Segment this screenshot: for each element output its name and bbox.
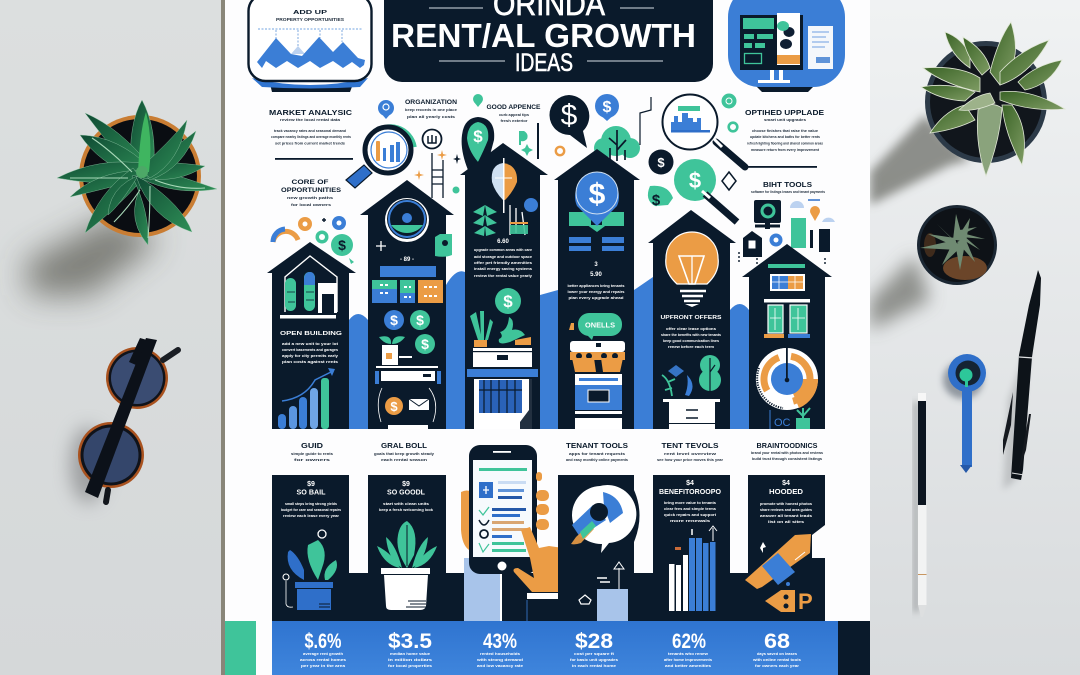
icon: round badge	[422, 130, 442, 148]
stat 6: with online rental tools	[752, 658, 801, 662]
panel: lower column 6: HOODED	[769, 489, 803, 496]
icon: orange tag letters	[765, 589, 813, 614]
labels row: section headings: TENT TEVOLS	[662, 441, 718, 450]
text block: organization: plan all yearly costs	[407, 115, 455, 119]
panel: column 1 building: plan costs against rents	[282, 360, 338, 364]
stat 5: and better amenities	[665, 664, 711, 668]
text block: organization: keep records in one place	[405, 108, 457, 112]
labels row: section headings: for owners	[294, 458, 330, 462]
labels row: section headings: apps for tenant requests	[569, 452, 625, 456]
icon: light bulb two-tone	[492, 158, 517, 213]
icon: fern leaf	[473, 205, 497, 236]
icon cluster: column 6 top	[739, 200, 835, 266]
icon: teal pin behind column 3	[462, 117, 494, 170]
text block: organization	[405, 100, 457, 119]
icon: speech badge: ONELLS	[585, 322, 615, 330]
stat 6	[752, 630, 801, 668]
panel: column 4 building: plan every upgrade ahead	[568, 296, 624, 300]
icon: ladder and sparkles	[414, 150, 461, 198]
text block: core opportunities: new growth paths	[287, 196, 333, 200]
icon: teal coin with magnifier handle	[674, 159, 737, 222]
icon: magnifier with bars	[346, 126, 415, 188]
panel: top-left chart card	[248, 0, 372, 92]
panel: column 3 building: offer pet friendly amenities	[474, 261, 532, 265]
text block: optimized upgrade: choose finishes that raise the value	[752, 129, 818, 133]
panel: column 5 building: UPFRONT OFFERS	[660, 315, 722, 321]
panel: column 5 building	[648, 210, 736, 429]
icon: small succulent in dark pot	[917, 205, 997, 285]
panel: lower column 5: quick repairs and support	[664, 513, 717, 517]
panel: dark corner block	[838, 621, 870, 675]
panel: lower column 5: more renewals	[670, 519, 710, 523]
icon: plants and tree	[662, 355, 721, 396]
panel: column 4 building: better appliances bring tenants	[568, 284, 624, 288]
stat 3: 43%	[483, 630, 517, 653]
stat 6: 68	[764, 630, 790, 653]
icon: light box with arrow	[579, 562, 628, 621]
icon: plant and blue letters	[770, 408, 810, 429]
text block: best tools: software for listings leases and tenant payments	[751, 190, 825, 194]
icon cluster: column 1 top	[273, 216, 354, 264]
panel: column 2 building: - 89 -	[400, 257, 414, 263]
icon: round sunglasses	[78, 338, 178, 502]
icon: kitchen appliance	[570, 341, 625, 429]
text block: market analysis: MARKET ANALYSIC	[269, 108, 353, 117]
panel: column 1 building: OPEN BUILDING	[280, 331, 342, 337]
text block: market analysis	[269, 108, 353, 160]
icon: coins: $	[416, 312, 424, 328]
text block: optimized upgrade: measure return from every improvement	[751, 148, 820, 152]
poster sheet	[225, 0, 870, 675]
panel: lower column 2	[368, 475, 446, 621]
poster edge	[221, 0, 225, 675]
panel: lower column 5: clear fees and simple terms	[664, 507, 716, 511]
panel: column 5 building: keep good communication lines	[663, 339, 719, 343]
icon: hand pointing	[514, 472, 570, 592]
icon: orange coin and envelope: $	[390, 399, 398, 414]
panel: top-left chart card: ADD UP	[293, 10, 328, 16]
text block: core opportunities	[281, 180, 341, 207]
icon: phone with checklist and hand	[461, 445, 573, 621]
stat 4: for basic unit upgrades	[570, 658, 618, 662]
icon: teal sparkle and letter	[519, 123, 539, 159]
stat 4: $28	[575, 630, 613, 653]
text block: good appeal: fresh exterior	[500, 119, 528, 123]
panel: lower column 6: $4	[782, 480, 790, 487]
icon: teal coin with magnifier handle: $	[689, 168, 701, 193]
stat 2: $3.5	[388, 630, 432, 653]
labels row: section headings: brand your rental with photos and reviews	[751, 451, 823, 455]
icon: house facade	[280, 256, 337, 318]
stat 6: days saved on leases	[757, 652, 797, 656]
panel: lower column 4	[558, 475, 640, 621]
shadow: small plant	[870, 255, 930, 330]
stat 5: tenants who renew	[668, 652, 708, 656]
panel: lower column 5: bring more value to tenants	[664, 501, 716, 505]
panel: column 1 building: add a new unit to your lot	[282, 342, 339, 346]
icon: blue location pin	[378, 100, 394, 119]
title: IDEAS	[515, 49, 573, 77]
icon: white dresser	[663, 399, 720, 429]
icon: small coins: $	[657, 155, 665, 170]
panel: lower column 2: $9	[402, 481, 410, 488]
panel: lower column 6: promote with honest photos	[760, 502, 812, 506]
labels row: section headings: and easy monthly online payments	[566, 458, 628, 462]
panel: lower column 2: start with clean units	[383, 502, 429, 506]
panel: lower column 6: list on all sites	[768, 520, 804, 524]
panel: column 3 building	[460, 143, 548, 429]
chart: donut	[756, 347, 818, 410]
panel: column 4 building	[554, 149, 640, 429]
title: RENT/AL GROWTH	[391, 17, 696, 54]
panel: column 5 building: share the benefits with new tenants	[661, 333, 721, 337]
text block: best tools	[751, 180, 825, 194]
labels row: section headings: rent level overview	[664, 452, 716, 456]
text block: market analysis: review the local rental data	[280, 118, 341, 122]
labels row: section headings: goals that keep growth steady	[374, 452, 435, 456]
panel: column 3 building: review the rental value yearly	[474, 274, 533, 278]
stat 1: average rent growth	[303, 652, 344, 656]
labels row: section headings: simple guide to rents	[291, 452, 333, 456]
icon: orange coin and envelope	[378, 388, 436, 422]
panel: teal corner block	[225, 621, 256, 675]
icon: teal pouch	[648, 186, 673, 209]
icon: white cabinet	[467, 348, 538, 429]
text block: good appeal: curb appeal tips	[499, 113, 529, 117]
icon: coins	[384, 310, 435, 354]
title	[391, 0, 696, 77]
icon: monitor	[740, 13, 803, 83]
labels row: section headings: GRAL BOLL	[381, 441, 427, 450]
background: desk left	[0, 0, 225, 675]
stat 2: median home value	[390, 652, 430, 656]
panel: lower column 6	[745, 475, 825, 621]
icon: blue dollar shield	[569, 172, 624, 251]
text block: optimized upgrade: update kitchens and baths for better rents	[750, 135, 820, 139]
panel: column 5 building: offer clear lease options	[666, 327, 716, 331]
shadow: left plant	[25, 215, 160, 295]
panel: lower column 1	[272, 475, 349, 621]
text block: good appeal: GOOD APPENCE	[486, 105, 540, 111]
panel: lower column 6: share reviews and area guides	[760, 508, 812, 512]
panel: lower column 1: $9	[307, 481, 315, 488]
stat 3: and low vacancy rate	[477, 664, 523, 668]
icon: magnifier speech bubble	[571, 485, 636, 553]
text block: market analysis: track vacancy rates and seasonal demand	[274, 129, 347, 133]
icon: teal tree	[594, 126, 640, 161]
panel: column 6 building	[742, 244, 832, 429]
panel: column 3 building: install energy saving systems	[474, 267, 532, 271]
icon: sprout and box	[379, 336, 412, 365]
panel: lower column 1: review each lease every year	[283, 514, 340, 518]
tiles grid	[372, 280, 443, 303]
text block: core opportunities: CORE OF	[292, 180, 329, 186]
text block: optimized upgrade: smart unit upgrades	[764, 118, 806, 122]
labels row: section headings: see how your price moves this year	[657, 458, 724, 462]
stat 2: in million dollars	[388, 658, 432, 662]
labels row: section headings: each rental season	[381, 458, 428, 462]
stat 5: after home improvements	[664, 658, 712, 662]
panel: column 3 building: upgrade common areas with care	[474, 248, 532, 252]
stat 3: rented households	[480, 652, 520, 656]
panel: lower column 6: answer all tenant leads	[760, 514, 812, 518]
panel: title banner	[384, 0, 713, 82]
panel: lower column 1: SO BAIL	[296, 490, 326, 496]
icon: coins: $	[390, 312, 398, 328]
icon: white pot with teal plant	[377, 521, 437, 610]
stat 5	[664, 630, 712, 668]
panel: lower dark base	[272, 573, 825, 621]
panel: lower column 2: SO GOODL	[387, 490, 426, 496]
stat 4: in each rental home	[572, 664, 616, 668]
icon: black ballpoint pen	[1003, 270, 1041, 490]
panel: column 4 building: 3	[594, 262, 598, 268]
stat 3	[476, 630, 524, 668]
panel: column 1 building: apply for city permits early	[282, 354, 339, 358]
icon: teal location pin	[473, 94, 483, 107]
icon: potted plants	[470, 311, 531, 347]
icon: blue dollar pin: $	[603, 99, 612, 116]
panel: lower column 5: BENEFITOROOPO	[659, 489, 722, 496]
icon: orange pencil	[745, 534, 811, 589]
stat 2: for local properties	[388, 664, 432, 668]
labels row: section headings: BRAINTOODNICS	[756, 441, 818, 450]
icon: white and black pen	[914, 393, 926, 617]
icon: blue magnifier tool	[943, 354, 986, 473]
text block: optimized upgrade: refresh lighting flooring and shared common areas	[747, 142, 823, 146]
text block: organization: ORGANIZATION	[405, 100, 457, 106]
icon: teal pin behind column 3: $	[473, 127, 483, 146]
icon: window	[770, 274, 805, 291]
panel: lower column 2: keep a fresh welcoming look	[379, 508, 434, 512]
panel: column 4 building: lower your energy and repairs	[568, 290, 624, 294]
panel: lower column 5	[653, 475, 730, 621]
icon: small coins	[648, 94, 737, 174]
stat 1: per year in the area	[301, 664, 346, 668]
text block: optimized upgrade: OPTIHED UPPLADE	[745, 108, 824, 117]
panel: column 5 building: renew before each term	[668, 345, 715, 349]
panel: top-right monitor badge	[728, 0, 845, 92]
panel: column 1 building	[267, 242, 356, 429]
stat 6: for owners each year	[755, 664, 800, 668]
background: desk right	[870, 0, 1080, 675]
icon: coins: $	[421, 336, 429, 352]
stat 4	[570, 630, 618, 668]
icon: blue dollar shield: $	[589, 178, 606, 211]
text block: market analysis: compare nearby listings and average monthly rents	[271, 135, 351, 139]
icon: large snake plant in dark pot	[921, 22, 1065, 176]
icon: balcony doors	[764, 305, 810, 338]
text block: market analysis: set prices from current market trends	[275, 142, 345, 146]
icon: potted plant blue	[283, 530, 337, 610]
labels row: section headings: build trust through consistent listings	[752, 457, 822, 461]
panel: top-left chart card: PROPERTY OPPORTUNITIES	[276, 17, 344, 22]
text block: optimized upgrade	[745, 108, 824, 168]
icon: orange ring	[556, 147, 564, 155]
panel: column 2 building	[360, 180, 454, 429]
icon: roundel	[385, 198, 429, 242]
icon: speech badge	[569, 313, 622, 340]
stat 4: cost per square ft	[574, 652, 615, 656]
icon: blue dollar pin	[595, 94, 619, 121]
shadow: sunglasses	[70, 427, 106, 503]
text block: core opportunities: for local owners	[291, 203, 331, 207]
panel: column 3 building: $	[503, 292, 513, 311]
shadow: right plant	[870, 115, 970, 205]
panel: column 3 building: add storage and outdoor space	[474, 255, 532, 259]
icon: teal tag	[435, 234, 452, 257]
icon: left succulent in terracotta pot	[57, 100, 217, 245]
text block: good appeal	[486, 105, 540, 123]
text block: best tools: BIHT TOOLS	[763, 180, 812, 189]
icon: magnifier with skyline	[662, 94, 745, 167]
icon: plant and blue letters: OC	[774, 417, 791, 429]
panel: blue statistics strip	[272, 621, 838, 675]
icon: small connector line	[640, 97, 651, 145]
stat 1	[300, 630, 346, 668]
panel: column 4 building: 5.90	[590, 272, 602, 278]
icon: orange light bulb	[666, 232, 718, 307]
icon: document	[808, 26, 833, 69]
icon: speech bubble dollar	[549, 95, 589, 148]
panel: lower column 5: $4	[686, 480, 694, 487]
panel: column 1 building: convert basements and garages	[282, 348, 338, 352]
bar chart: rising bars	[278, 368, 335, 429]
panel: lower column 1: budget for care and seasonal repairs	[281, 508, 341, 512]
labels row: section headings: TENANT TOOLS	[566, 441, 628, 450]
stat 1: $.6%	[304, 630, 342, 653]
icon: teal pouch: $	[652, 192, 661, 209]
stat 3: with strong demand	[476, 658, 524, 662]
icon: orange tag letters: P	[798, 589, 813, 614]
stat 2	[388, 630, 432, 668]
labels row: section headings	[291, 441, 823, 462]
icon cluster: column 1 top: $	[338, 237, 346, 253]
labels row: section headings: GUID	[301, 441, 324, 450]
stat 1: across rental homes	[300, 658, 346, 662]
panel: lower column 1: small steps bring strong yields	[285, 502, 337, 506]
icon: speech bubble dollar: $	[561, 99, 578, 132]
blue wave behind columns	[349, 271, 749, 429]
bar chart: white and blue bars	[669, 526, 717, 611]
text block: core opportunities: OPPORTUNITIES	[281, 188, 341, 194]
panel: column 3 building: 6.60	[497, 239, 509, 245]
stat 5: 62%	[672, 630, 706, 653]
